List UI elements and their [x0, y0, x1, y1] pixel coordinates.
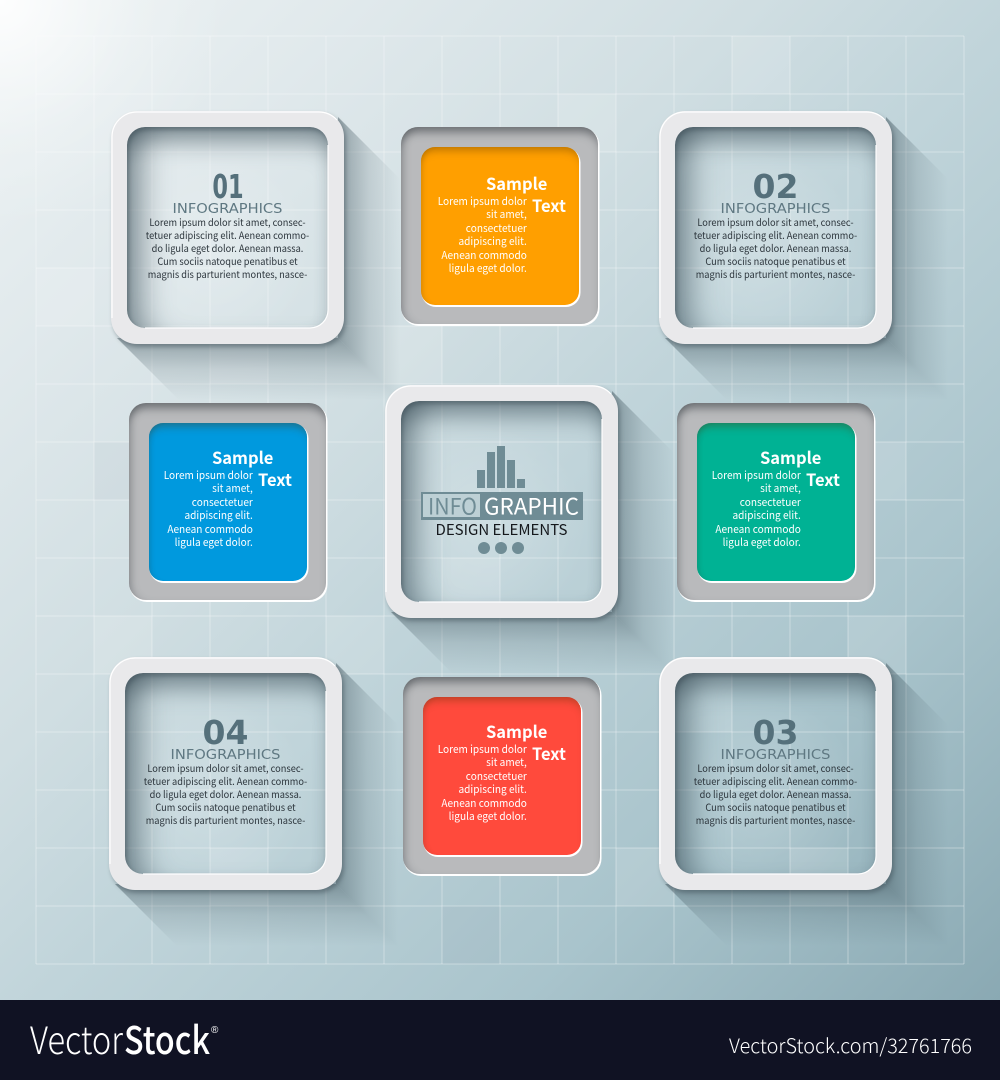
text block	[164, 468, 253, 550]
text block: Aenean commodo	[441, 796, 527, 811]
panel: blue card	[129, 403, 326, 600]
text block: Lorem ipsum dolor	[438, 194, 527, 209]
number 04: 04	[203, 713, 248, 752]
number 03: 03	[753, 713, 798, 752]
text block	[146, 214, 309, 281]
text block: adipiscing elit.	[459, 782, 527, 797]
text block: consectetuer	[466, 769, 527, 784]
footer bar	[0, 1000, 1000, 1080]
text block: magnis dis parturient montes, nasce-	[148, 266, 307, 281]
text block: magnis dis parturient montes, nasce-	[146, 812, 305, 827]
panel: centre frame	[384, 385, 622, 623]
heading: text: Text	[258, 467, 292, 491]
text block	[144, 760, 307, 827]
text block: Lorem ipsum dolor sit amet, consec-	[147, 760, 304, 775]
label: infographics: INFOGRAPHICS	[721, 201, 830, 217]
text block: do ligula eget dolor. Aenean massa.	[150, 786, 301, 801]
logo and image id: VectorStock.com/32761766	[729, 1030, 972, 1059]
text block: Lorem ipsum dolor sit amet, consec-	[697, 760, 854, 775]
logo and image id	[30, 1010, 972, 1065]
text block: adipiscing elit.	[459, 234, 527, 249]
text block: magnis dis parturient montes, nasce-	[696, 812, 855, 827]
text block: adipiscing elit.	[733, 508, 801, 523]
banner: infographic	[421, 492, 583, 520]
text block: Aenean commodo	[715, 522, 801, 537]
label: infographics: INFOGRAPHICS	[171, 747, 280, 763]
heading: sample: Sample	[212, 445, 273, 469]
panel: frame 01	[110, 111, 348, 349]
logo and image id: Vector	[30, 1010, 123, 1065]
text block: tetuer adipiscing elit. Aenean commo-	[146, 227, 309, 242]
text block: Cum sociis natoque penatibus et	[155, 799, 296, 814]
text block: Aenean commodo	[167, 522, 253, 537]
text block: magnis dis parturient montes, nasce-	[696, 266, 855, 281]
number 02: 02	[753, 167, 798, 206]
text block: consectetuer	[740, 495, 801, 510]
heading: text: Text	[532, 193, 566, 217]
panel: frame 04	[108, 657, 346, 895]
label: infographics: INFOGRAPHICS	[721, 747, 830, 763]
text block: tetuer adipiscing elit. Aenean commo-	[694, 227, 857, 242]
text block: do ligula eget dolor. Aenean massa.	[700, 240, 851, 255]
text block: Lorem ipsum dolor	[712, 468, 801, 483]
heading: sample: Sample	[486, 171, 547, 195]
text block: Lorem ipsum dolor sit amet, consec-	[149, 214, 306, 229]
panel: red card	[403, 677, 600, 874]
text block: ligula eget dolor.	[449, 261, 527, 276]
icon: bar chart	[477, 446, 525, 488]
text block: ligula eget dolor.	[175, 535, 253, 550]
text block: Lorem ipsum dolor	[438, 742, 527, 757]
logo and image id: Stock	[124, 1010, 210, 1065]
text block: sit amet,	[212, 481, 253, 496]
logo and image id: ®	[211, 1025, 219, 1036]
text block	[694, 214, 857, 281]
text block: tetuer adipiscing elit. Aenean commo-	[144, 773, 307, 788]
panel: frame 03	[658, 657, 896, 895]
text block: Lorem ipsum dolor	[164, 468, 253, 483]
number 01: 01	[212, 167, 243, 206]
heading: text: Text	[806, 467, 840, 491]
icon: three dots	[478, 542, 524, 554]
text block: sit amet,	[486, 755, 527, 770]
text block: Lorem ipsum dolor sit amet, consec-	[697, 214, 854, 229]
heading: sample: Sample	[760, 445, 821, 469]
text block: do ligula eget dolor. Aenean massa.	[700, 786, 851, 801]
panel: green card	[677, 403, 874, 600]
text block: adipiscing elit.	[185, 508, 253, 523]
text block	[438, 194, 527, 276]
subtitle: DESIGN ELEMENTS	[436, 519, 567, 540]
label: infographics: INFOGRAPHICS	[173, 201, 282, 217]
text block: consectetuer	[192, 495, 253, 510]
text block: do ligula eget dolor. Aenean massa.	[152, 240, 303, 255]
text block: Cum sociis natoque penatibus et	[705, 799, 846, 814]
heading: text: Text	[532, 741, 566, 765]
text block: ligula eget dolor.	[449, 809, 527, 824]
text block: sit amet,	[486, 207, 527, 222]
panel: orange card	[401, 127, 598, 324]
text block	[694, 760, 857, 827]
panel: frame 02	[658, 111, 896, 349]
text block: sit amet,	[760, 481, 801, 496]
text block: Cum sociis natoque penatibus et	[705, 253, 846, 268]
text block	[712, 468, 801, 550]
text block	[438, 742, 527, 824]
text block: Cum sociis natoque penatibus et	[157, 253, 298, 268]
heading: sample: Sample	[486, 719, 547, 743]
text block: ligula eget dolor.	[723, 535, 801, 550]
text block: Aenean commodo	[441, 248, 527, 263]
text block: consectetuer	[466, 221, 527, 236]
text block: tetuer adipiscing elit. Aenean commo-	[694, 773, 857, 788]
